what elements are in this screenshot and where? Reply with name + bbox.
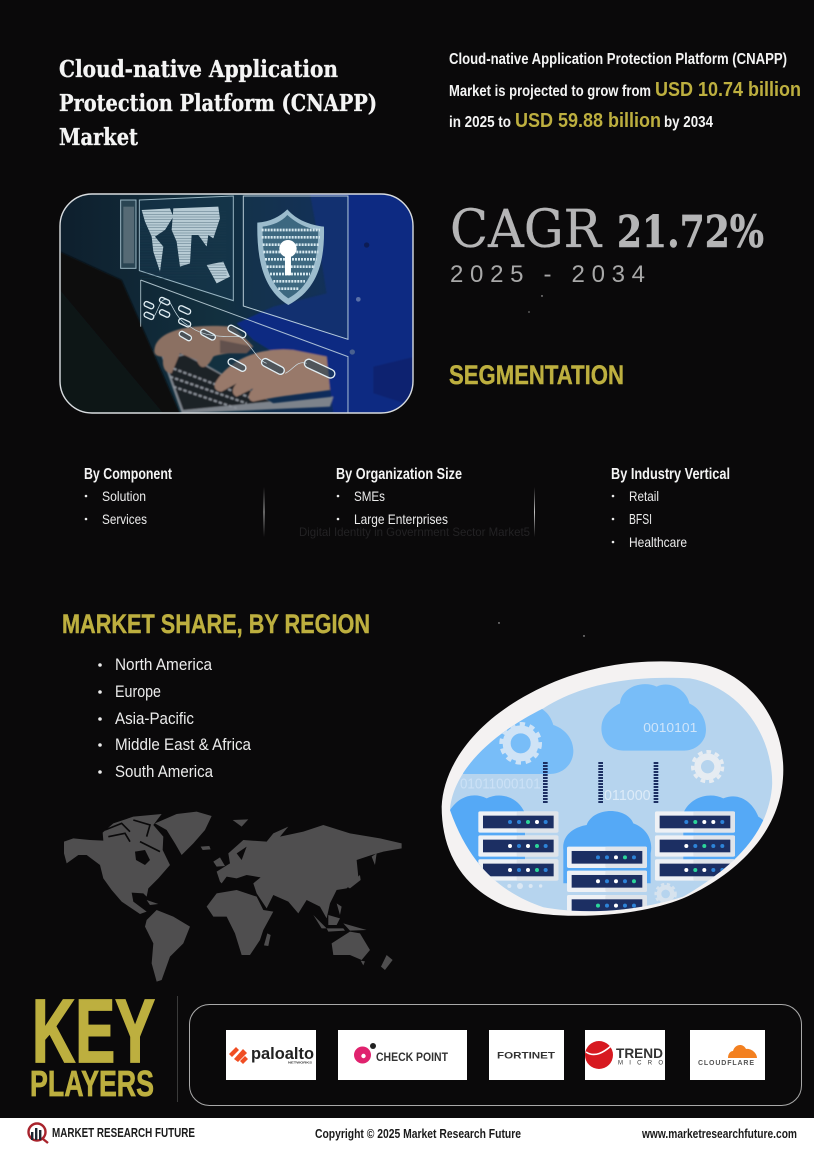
region list: Middle East & Africa [115,735,251,754]
key players heading: PLAYERS [30,1063,154,1104]
logo: trend micro: MICRO [618,1060,663,1066]
title: Market [59,124,138,151]
rack lights [508,820,724,908]
segment: by industry vertical: Retail [629,488,659,504]
server racks left [478,811,558,833]
key players heading [30,982,155,1104]
binary labels: 011000 [604,787,651,804]
market projection text: Market is projected to grow from [449,83,651,100]
title [59,56,377,151]
keyboard [162,353,333,413]
segment: by organization size: SMEs [354,488,385,504]
logo: fortinet: FORTINET [497,1050,555,1062]
map panel [139,196,233,301]
divider [534,487,535,537]
region list: North America [115,655,212,674]
cloud server illustration [442,661,784,916]
hands [154,326,253,373]
footer bar [0,1118,814,1150]
server racks right [655,811,735,833]
hero photo border [60,194,413,413]
divider [264,487,265,537]
binary labels: 0010101 [643,721,697,735]
small dots [507,883,542,889]
segment: by industry vertical [611,466,730,550]
segment: by component: Solution [102,488,146,504]
segment: by industry vertical: BFSI [629,511,652,528]
copyright: Copyright © 2025 Market Research Future [315,1126,521,1141]
segment: by organization size: By Organization Size [336,466,462,483]
world map [64,812,402,982]
CAGR figure: 21.72% [617,207,764,258]
footer brand: MARKET RESEARCH FUTURE [52,1126,195,1140]
market projection text [449,51,801,132]
market share heading: MARKET SHARE, BY REGION [62,609,370,639]
key players heading: KEY [32,982,155,1082]
gears [507,729,535,757]
small panel [121,200,136,268]
market projection text: in 2025 to [449,114,511,131]
region list [98,655,251,781]
footer logo [28,1124,48,1143]
server racks centre [567,847,647,868]
binary labels [460,721,697,804]
CAGR figure [450,200,764,288]
market projection text: by 2034 [664,114,713,131]
shield panel [243,196,348,339]
region list: Asia-Pacific [115,709,194,728]
logo: cloudflare: CLOUDFLARE [698,1060,754,1067]
logo: cloudflare [690,1030,765,1080]
specks [498,295,585,637]
segmentation heading: SEGMENTATION [449,360,624,390]
logo: check point [338,1030,467,1080]
logo: palo alto [226,1030,316,1080]
CAGR figure: CAGR [450,200,603,260]
title: Cloud-native Application [59,56,338,83]
shirt buttons [364,242,369,248]
binary labels: 01011000101 [460,776,541,793]
CAGR figure: 2025 - 2034 [450,261,645,288]
segment: by component: Services [102,511,147,527]
connectors [545,762,656,804]
segment: by component: By Component [84,466,172,483]
segment: by industry vertical: By Industry Vertical [611,466,730,483]
segment: by component [84,466,172,527]
title: Protection Platform (CNAPP) [59,90,377,117]
region list: Europe [115,682,161,701]
key players panel [190,1004,802,1106]
shield [257,209,324,305]
logo: trend micro: TREND [616,1045,663,1061]
segment: by organization size [336,466,462,527]
network panel [141,280,348,413]
logo: fortinet [489,1030,564,1080]
clouds [460,705,573,774]
segment: by industry vertical: Healthcare [629,534,687,550]
region list: South America [115,762,213,781]
market projection text: USD 59.88 billion [515,109,661,132]
laptop lid [60,252,180,413]
logo: palo alto: NETWORKS [288,1060,312,1064]
logo: trend micro [585,1030,665,1080]
faint hidden label: Digital Identity in Government Sector Market5 [299,525,530,539]
divider [177,996,178,1102]
logo: check point: CHECK POINT [376,1052,448,1064]
logo: palo alto: paloalto [251,1044,314,1063]
segment: by organization size: Large Enterprises [354,511,448,527]
sleeve [237,193,415,413]
hero photo: laptop with cyber security overlay [60,193,415,413]
